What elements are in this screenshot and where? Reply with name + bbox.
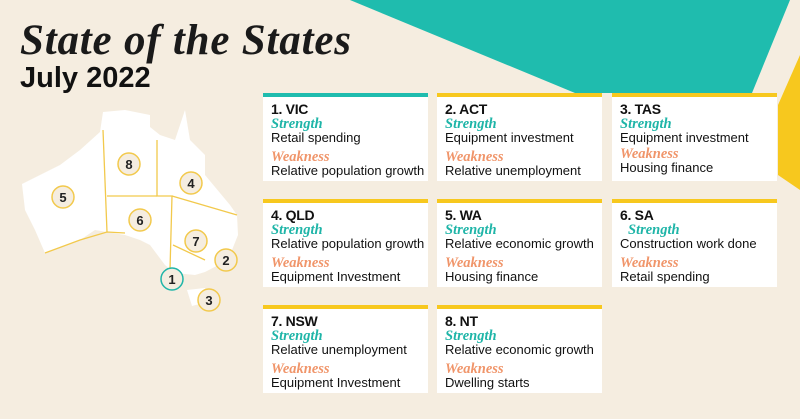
card: VIC: Strength <box>271 116 323 132</box>
map of Australia: 1 <box>168 272 176 287</box>
card: NSW: Relative unemployment Equipment Investment <box>271 342 407 390</box>
card: VIC: 1. VIC <box>271 101 308 117</box>
card: NSW <box>263 305 428 393</box>
map of Australia <box>22 110 238 312</box>
card: ACT: Equipment investment Relative unemployment <box>445 130 581 178</box>
card: SA <box>612 199 777 287</box>
card: NSW: 7. NSW <box>271 313 317 329</box>
card: NT: 8. NT <box>445 313 478 329</box>
card: ACT <box>437 93 602 181</box>
card: WA: Strength <box>445 222 497 238</box>
card: VIC: Weakness <box>271 149 330 165</box>
card: QLD: Relative population growth Equipment Investment <box>271 236 424 284</box>
card: QLD: Strength <box>271 222 323 238</box>
card: QLD <box>263 199 428 287</box>
card: TAS: Equipment investment Housing finance <box>620 130 749 175</box>
card: SA: Weakness <box>620 255 679 271</box>
map of Australia: 7 <box>192 234 200 249</box>
card: ACT: 2. ACT <box>445 101 487 117</box>
card: NT: Relative economic growth Dwelling starts <box>445 342 594 390</box>
card: VIC: Retail spending Relative population growth <box>271 130 424 178</box>
card: QLD: Weakness <box>271 255 330 271</box>
card: SA: Strength <box>628 222 680 238</box>
card: NT: Strength <box>445 328 497 344</box>
card: WA <box>437 199 602 287</box>
subtitle: July 2022 <box>20 62 151 94</box>
card: VIC <box>263 93 428 181</box>
map of Australia: 2 <box>222 253 230 268</box>
card: SA: Construction work done Retail spending <box>620 236 757 284</box>
map of Australia: 5 <box>59 190 67 205</box>
card: TAS: Weakness <box>620 146 679 162</box>
card: TAS: Strength <box>620 116 672 132</box>
map of Australia: 4 <box>187 176 195 191</box>
card: ACT: Weakness <box>445 149 504 165</box>
map of Australia: 8 <box>125 157 133 172</box>
card: NT: Weakness <box>445 361 504 377</box>
card: TAS: 3. TAS <box>620 101 661 117</box>
card: NSW: Strength <box>271 328 323 344</box>
card: WA: 5. WA <box>445 207 482 223</box>
card: ACT: Strength <box>445 116 497 132</box>
card: NSW: Weakness <box>271 361 330 377</box>
card: QLD: 4. QLD <box>271 207 314 223</box>
map of Australia: 6 <box>136 213 144 228</box>
card: WA: Relative economic growth Housing finance <box>445 236 594 284</box>
card: WA: Weakness <box>445 255 504 271</box>
card: NT <box>437 305 602 393</box>
card: SA: 6. SA <box>620 207 654 223</box>
title: State of the States <box>20 17 352 64</box>
map of Australia: 3 <box>205 293 213 308</box>
card: TAS <box>612 93 777 181</box>
